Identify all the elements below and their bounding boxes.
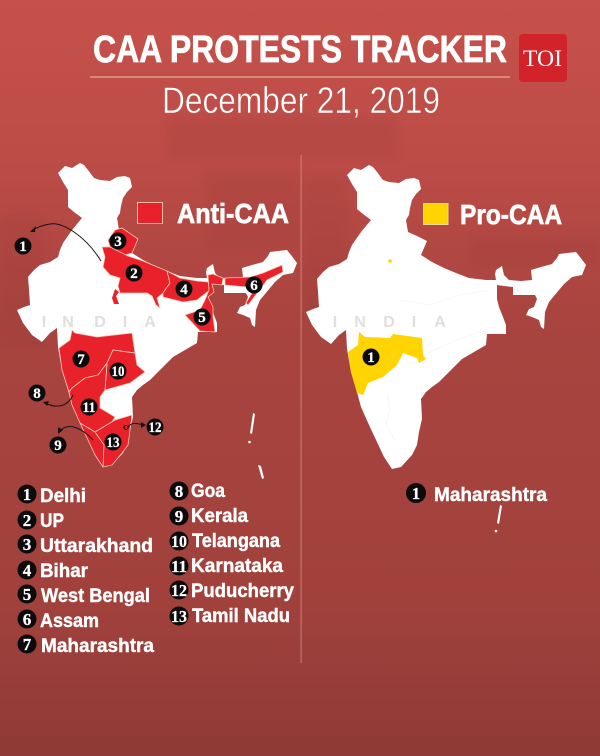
state: Assam bbox=[225, 265, 283, 305]
marker 1 bbox=[14, 238, 32, 255]
item: Assam: Assam bbox=[40, 611, 99, 632]
marker 11: 11 bbox=[82, 400, 96, 416]
list: Anti-CAA states column 1 bbox=[18, 484, 154, 657]
item: Bihar bbox=[18, 560, 89, 582]
map label: INDIA: N bbox=[62, 314, 74, 331]
map label: INDIA: I bbox=[333, 314, 337, 331]
marker 2: 2 bbox=[130, 266, 138, 282]
marker 5 bbox=[194, 308, 210, 326]
map label: INDIA bbox=[42, 314, 156, 331]
arrow: Puducherry bbox=[124, 422, 146, 430]
state: Telangana bbox=[105, 350, 145, 390]
map label: INDIA: A bbox=[434, 314, 446, 331]
item: Puducherry: Puducherry bbox=[191, 581, 294, 602]
map: India outline bbox=[306, 165, 586, 469]
state: Maharashtra bbox=[348, 332, 426, 395]
map label: INDIA: A bbox=[144, 314, 156, 331]
item: Telangana: 10 bbox=[171, 532, 187, 551]
item: West Bengal: West Bengal bbox=[41, 586, 150, 607]
state border: Kerala bbox=[95, 432, 104, 467]
marker 4 bbox=[176, 280, 192, 298]
heading: Anti-CAA: Anti-CAA bbox=[177, 198, 289, 229]
icon: TOI logo: TOI bbox=[523, 46, 562, 71]
map label: INDIA: D bbox=[94, 314, 106, 331]
icon: TOI logo bbox=[519, 34, 567, 82]
arrow: Goa bbox=[43, 395, 73, 406]
legend: Anti-CAA swatch bbox=[138, 202, 162, 224]
islands bbox=[248, 413, 264, 479]
marker 7 bbox=[72, 350, 90, 368]
arrow: Delhi bbox=[30, 224, 101, 261]
item: Maharashtra: Maharashtra bbox=[41, 636, 154, 657]
state: Delhi dot bbox=[388, 259, 392, 263]
list: Anti-CAA states column 2 bbox=[170, 481, 294, 627]
panel: Pro-CAA map bbox=[306, 165, 586, 532]
marker 9 bbox=[50, 436, 66, 454]
state: Karnataka bbox=[69, 363, 115, 432]
panel divider bbox=[300, 155, 302, 663]
item: Maharashtra: 7 bbox=[23, 635, 32, 654]
marker 5: 5 bbox=[198, 310, 206, 326]
marker 4: 4 bbox=[180, 282, 188, 298]
marker 9: 9 bbox=[54, 438, 62, 454]
state: West Bengal bbox=[185, 274, 223, 332]
marker 3: 3 bbox=[114, 234, 122, 250]
item: Kerala: 9 bbox=[175, 507, 183, 526]
item: Goa: 8 bbox=[175, 482, 183, 501]
heading: Pro-CAA: Pro-CAA bbox=[460, 199, 562, 230]
item: Bihar: 4 bbox=[23, 561, 32, 580]
item: Bihar: Bihar bbox=[40, 561, 89, 582]
state: Uttar Pradesh bbox=[102, 247, 170, 308]
islands bbox=[495, 505, 502, 532]
marker 6: 6 bbox=[250, 278, 258, 294]
item: Kerala: Kerala bbox=[191, 506, 248, 527]
map label: INDIA: D bbox=[383, 314, 395, 331]
item: Uttarakhand: Uttarakhand bbox=[40, 536, 153, 557]
date subtitle: December 21, 2019 bbox=[162, 80, 440, 121]
item: Delhi: 1 bbox=[23, 485, 31, 504]
map label: INDIA: I bbox=[42, 314, 46, 331]
map label: INDIA: N bbox=[354, 314, 366, 331]
state: Tamil Nadu and Kerala bbox=[80, 415, 132, 467]
panel: Anti-CAA map bbox=[14, 163, 297, 479]
map: India outline bbox=[17, 163, 297, 467]
item: Delhi bbox=[18, 484, 86, 507]
marker 6 bbox=[246, 276, 262, 294]
marker 2 bbox=[126, 264, 142, 282]
item: UP: 2 bbox=[23, 511, 31, 530]
marker 3 bbox=[110, 232, 126, 250]
item: Puducherry: 12 bbox=[171, 581, 187, 600]
list: Pro-CAA states: 1 bbox=[412, 484, 420, 503]
state: Uttar Pradesh southern tail bbox=[112, 289, 119, 304]
map label: INDIA bbox=[333, 314, 446, 331]
list: Pro-CAA states: Maharashtra bbox=[434, 485, 547, 506]
item: Assam: 6 bbox=[23, 610, 31, 629]
item: UP: UP bbox=[40, 511, 64, 532]
item: UP bbox=[18, 510, 64, 532]
item: Goa bbox=[170, 481, 225, 502]
marker 1 bbox=[362, 348, 380, 366]
legend: Pro-CAA swatch bbox=[424, 204, 448, 224]
arrow: Kerala bbox=[58, 427, 93, 440]
marker 10: 10 bbox=[112, 364, 124, 380]
item: Uttarakhand: 3 bbox=[23, 535, 31, 554]
faint state borders bbox=[386, 290, 490, 440]
item: Telangana: Telangana bbox=[192, 531, 280, 552]
state: Bihar bbox=[163, 271, 212, 302]
title: CAA PROTESTS TRACKER bbox=[93, 29, 507, 71]
item: Karnataka: 11 bbox=[171, 557, 187, 576]
title rule bbox=[90, 76, 510, 78]
state: Uttarakhand bbox=[108, 228, 138, 255]
marker 1: 1 bbox=[19, 239, 27, 255]
map label: INDIA: I bbox=[412, 314, 416, 331]
item: Tamil Nadu: Tamil Nadu bbox=[192, 606, 290, 627]
item: Goa: Goa bbox=[191, 481, 225, 502]
marker 1: 1 bbox=[367, 350, 375, 366]
marker 13: 13 bbox=[106, 435, 120, 451]
item: West Bengal: 5 bbox=[23, 585, 31, 604]
state: Maharashtra bbox=[59, 330, 135, 392]
map label: INDIA: I bbox=[123, 314, 127, 331]
item: Delhi: Delhi bbox=[40, 486, 86, 507]
marker 12: 12 bbox=[148, 420, 162, 436]
item: Karnataka: Karnataka bbox=[191, 556, 283, 577]
marker 8: 8 bbox=[33, 386, 41, 402]
marker 7: 7 bbox=[77, 352, 85, 368]
item: Tamil Nadu: 13 bbox=[171, 607, 187, 626]
marker 8 bbox=[28, 384, 46, 402]
item: Assam bbox=[18, 610, 99, 632]
